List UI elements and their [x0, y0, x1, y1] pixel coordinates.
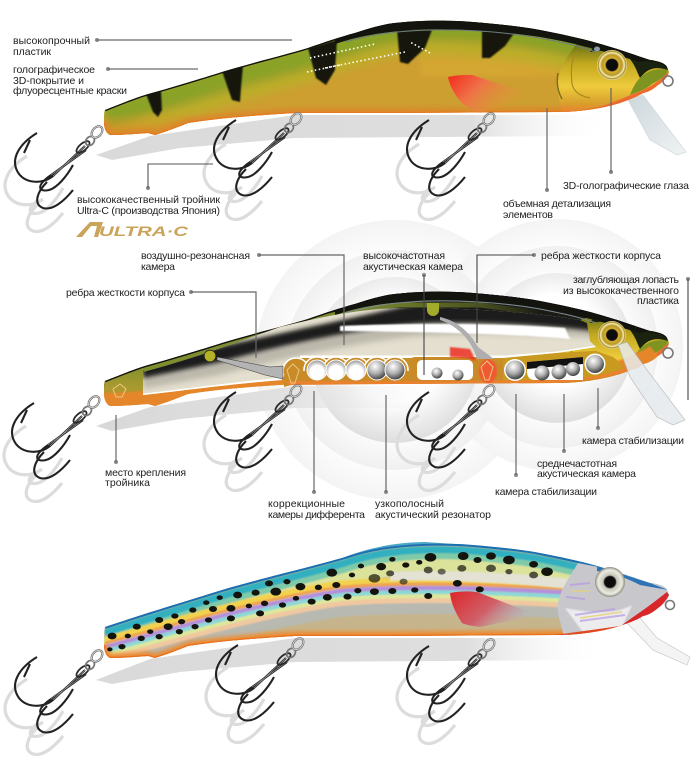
rib right: [440, 317, 494, 359]
head: [556, 42, 669, 112]
callout: body ribs left: [66, 287, 256, 358]
callout: diving lip: заглубляющая лопасть: [573, 274, 680, 286]
callout: holographic coating: голографическое: [13, 64, 95, 76]
callout: high-strength plastic: [13, 35, 292, 58]
lure 3: rainbow trout pattern: [5, 533, 690, 755]
red throat accent: [450, 347, 476, 361]
callout: Ultra-C treble: Ultra-C (производства Япония): [77, 205, 220, 217]
callout: holographic coating: флуоресцентные краски: [13, 85, 127, 97]
logo: Ultra-C: ULTRA·C: [99, 223, 189, 239]
callout: air resonance chamber: камера: [141, 261, 175, 273]
callout: high-frequency chamber: [363, 250, 463, 375]
callout: narrow-band resonator: акустический резонатор: [375, 509, 491, 521]
callout: holographic eyes: [563, 88, 689, 192]
hook shadows: [4, 415, 455, 502]
callout: high-strength plastic: высокопрочный: [13, 35, 90, 47]
inner cavity: [143, 308, 596, 395]
eye: [598, 321, 626, 349]
callout: Ultra-C treble: высококачественный тройник: [77, 194, 220, 206]
callout: stabilisation chamber 1: [495, 394, 597, 498]
correction chambers: [307, 360, 405, 380]
hook shadows: [5, 144, 455, 232]
treble mounts: [113, 361, 493, 397]
callout: mid-frequency chamber: акустическая камера: [537, 468, 636, 480]
highlight speckles: [307, 42, 430, 72]
diving lip: [625, 612, 690, 665]
nose ring: [663, 76, 673, 86]
mid-frequency chamber: [527, 357, 583, 380]
front stabilisation chamber: [584, 354, 606, 374]
callout: body ribs right: ребра жесткости корпуса: [541, 250, 661, 262]
callout: stabilisation chamber 2: камера стабилизации: [582, 435, 684, 447]
head: [558, 563, 669, 635]
callout: trim correction chambers: [268, 391, 365, 521]
callout: treble mount: место крепления: [105, 467, 186, 479]
hooks: [15, 111, 497, 209]
eye: [597, 50, 627, 80]
callout: narrow-band resonator: [375, 395, 491, 521]
callout: diving lip: из высококачественного: [563, 285, 679, 297]
hooks: [15, 636, 497, 733]
shadow under lure 2: [96, 386, 430, 431]
diving lip: [618, 342, 685, 425]
pectoral fin: [448, 75, 533, 113]
stabilisation chamber: [504, 359, 526, 381]
pectoral fin: [450, 591, 537, 627]
callout: treble mount: тройника: [105, 477, 150, 489]
body: [104, 542, 669, 658]
callout: body ribs left: ребра жесткости корпуса: [66, 287, 185, 299]
dark back band: [335, 21, 650, 62]
callout: high-frequency chamber: акустическая камера: [363, 261, 463, 273]
lure 1: perch pattern: [5, 10, 686, 232]
callout: treble mount: [105, 415, 186, 489]
callout: holographic coating: [13, 64, 198, 97]
callout: holographic eyes: 3D-голографические глаза: [563, 180, 689, 192]
callout: narrow-band resonator: узкополосный: [375, 498, 444, 510]
high-frequency chamber: [417, 360, 473, 380]
callout: mid-frequency chamber: среднечастотная: [537, 458, 617, 470]
callout: element detail: элементов: [503, 209, 553, 221]
chamber bumps: [283, 357, 528, 384]
callout: stabilisation chamber 2: [582, 388, 684, 447]
rib knobs: [204, 303, 439, 362]
nose ring: [663, 348, 673, 358]
background: concentric sound-wave circles: [255, 219, 683, 500]
callout: air resonance chamber: воздушно-резонансная: [141, 250, 250, 262]
cutaway body: [104, 292, 669, 406]
rainbow bands: [105, 550, 667, 667]
callout: high-frequency chamber: высокочастотная: [363, 250, 445, 262]
hook shadows: [5, 667, 455, 755]
lure 2: cutaway: [4, 281, 685, 502]
nose ring: [666, 600, 674, 610]
body: [104, 20, 669, 135]
callout: Ultra-C treble: [77, 164, 220, 217]
rib left: [217, 357, 283, 379]
callout: mid-frequency chamber: [537, 394, 636, 480]
callout: holographic coating: 3D-покрытие и: [13, 75, 84, 87]
callout: high-strength plastic: пластик: [13, 46, 51, 58]
callout: diving lip: пластика: [637, 295, 679, 307]
callout: trim correction chambers: камеры дифферента: [268, 509, 365, 521]
callout: diving lip: [563, 274, 690, 400]
callout: air resonance chamber: [141, 250, 344, 345]
shadow under lure 1: [96, 115, 615, 160]
callout: element detail: [503, 108, 611, 221]
shadow under lure 3: [96, 638, 610, 684]
green flank strip: [143, 305, 540, 370]
chamber block: [284, 351, 623, 387]
hooks: [12, 383, 497, 479]
callout: stabilisation chamber 1: камера стабилизации: [495, 486, 597, 498]
spots: [107, 552, 553, 651]
callout: body ribs right: [477, 250, 661, 343]
eye: [595, 567, 625, 597]
black stripes: [146, 30, 515, 117]
diving lip: [628, 95, 686, 155]
logo: Ultra-C: [76, 222, 189, 239]
line eye: [594, 46, 600, 52]
callout: element detail: объемная детализация: [503, 198, 611, 210]
callout: trim correction chambers: коррекционные: [268, 498, 345, 510]
